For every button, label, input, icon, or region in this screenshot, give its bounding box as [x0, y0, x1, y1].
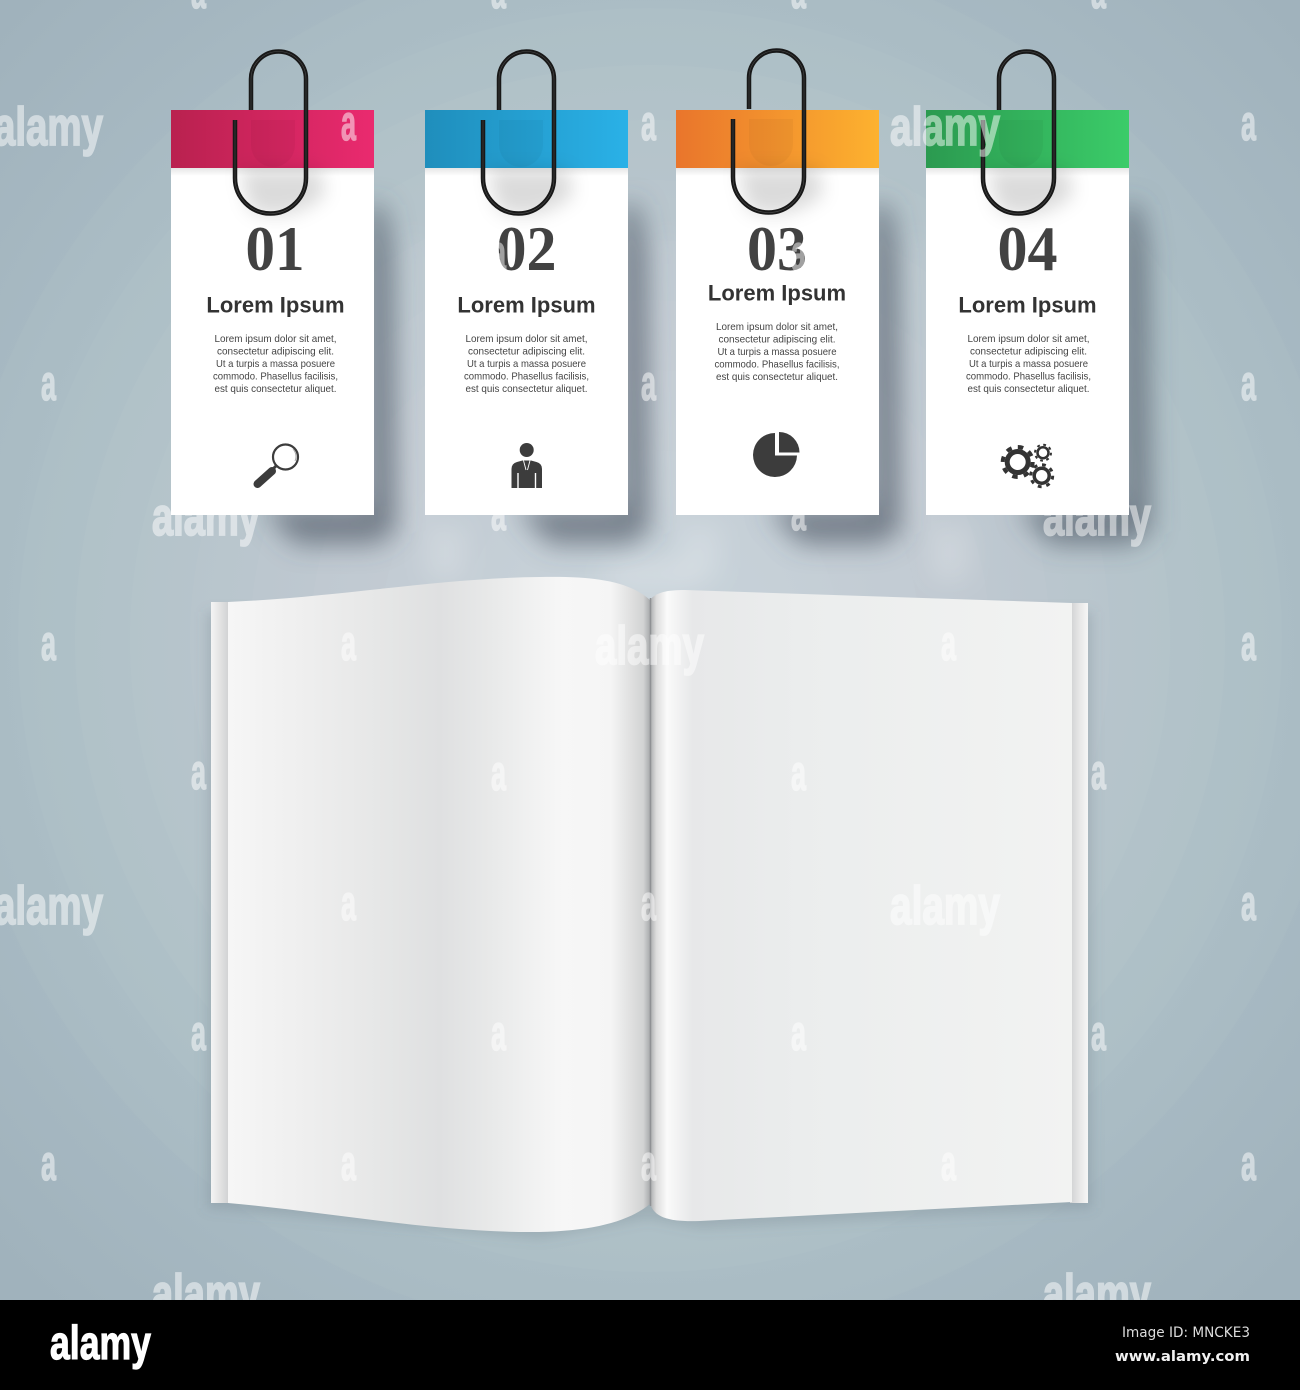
watermarks: alamy [152, 1264, 260, 1324]
book cover left [211, 602, 231, 1203]
panel: card 4 [926, 110, 1129, 515]
watermarks: alamy [1043, 487, 1151, 547]
left page [228, 577, 650, 1232]
icon: gears [1003, 445, 1053, 487]
card 3 body text: est quis consectetur aliquet. [716, 371, 838, 383]
card 2 body text: est quis consectetur aliquet. [466, 383, 588, 395]
website: www.alamy.com [1115, 1349, 1250, 1365]
card 4 body text: est quis consectetur aliquet. [968, 383, 1090, 395]
watermarks: a [1241, 355, 1257, 411]
watermarks: a [1241, 95, 1257, 151]
watermarks: alamy [1043, 1264, 1151, 1324]
card 2 body text: commodo. Phasellus facilisis, [464, 370, 589, 382]
watermarks: a [341, 1135, 357, 1191]
watermarks: a [491, 1005, 507, 1061]
card 3 orange band [676, 110, 879, 168]
card 2 body text: consectetur adipiscing elit. [468, 346, 585, 358]
image id: Image ID: MNCKE3 [1122, 1325, 1250, 1341]
panel: card 1 [171, 110, 374, 515]
watermarks: a [641, 355, 657, 411]
card 2 heading: Lorem Ipsum [457, 292, 596, 318]
card 4 body text: Ut a turpis a massa posuere [969, 358, 1088, 370]
card 4 paper [926, 168, 1129, 515]
watermarks: a [1091, 1005, 1107, 1061]
card 4 body text: consectetur adipiscing elit. [970, 346, 1087, 358]
card 3 paper [676, 168, 879, 515]
watermarks: a [791, 225, 807, 281]
panel: card 3 [676, 110, 879, 515]
card 1 number: 01 [246, 214, 304, 284]
watermarks: a [341, 615, 357, 671]
card 3 body text [714, 321, 840, 383]
footer logo: alamy [50, 1316, 151, 1369]
paperclip 3 [733, 50, 823, 214]
watermarks: a [1241, 615, 1257, 671]
icon: pie chart [753, 432, 800, 477]
card 2 paper [425, 168, 628, 515]
card 1 body text: Lorem ipsum dolor sit amet, [214, 333, 336, 345]
watermarks: a [491, 225, 507, 281]
card 1 pink band [171, 110, 374, 168]
watermarks: a [191, 744, 207, 800]
card 4 body text: Lorem ipsum dolor sit amet, [968, 333, 1090, 345]
card 2 body text: Ut a turpis a massa posuere [467, 358, 586, 370]
watermarks: alamy [890, 876, 1000, 936]
card 3 body text: Ut a turpis a massa posuere [718, 346, 837, 358]
watermarks: alamy [152, 487, 260, 547]
watermarks: a [341, 875, 357, 931]
watermarks: a [641, 875, 657, 931]
card 4 body text [966, 333, 1091, 395]
footer bar [0, 1300, 1300, 1390]
watermarks: a [941, 615, 957, 671]
watermarks: a [791, 485, 807, 541]
watermarks: a [41, 355, 57, 411]
card 3 body text: commodo. Phasellus facilisis, [714, 358, 840, 370]
card 3 body text: Lorem ipsum dolor sit amet, [716, 321, 838, 333]
watermarks: a [1241, 1135, 1257, 1191]
book shadow [207, 612, 1092, 1238]
right page [650, 590, 1072, 1221]
watermarks: a [41, 615, 57, 671]
paperclip 2 [483, 51, 573, 215]
card 2 body text: Lorem ipsum dolor sit amet, [466, 333, 588, 345]
watermarks: a [791, 1005, 807, 1061]
book spine line [650, 598, 652, 1206]
card 1 body text: Ut a turpis a massa posuere [216, 358, 335, 370]
card 1 body text: est quis consectetur aliquet. [214, 383, 336, 395]
icon: business person [512, 443, 542, 488]
card 1 heading: Lorem Ipsum [206, 292, 345, 318]
paperclip 1 [235, 51, 325, 215]
card 2 body text [464, 333, 589, 395]
card 1 body text: consectetur adipiscing elit. [217, 346, 334, 358]
watermarks: alamy [595, 616, 704, 676]
watermarks: a [491, 485, 507, 541]
card 2 blue band [425, 110, 628, 168]
watermarks: a [791, 745, 807, 801]
watermarks: a [191, 1005, 207, 1061]
watermarks: a [941, 1135, 957, 1191]
open book [207, 577, 1092, 1238]
card 3 number: 03 [747, 214, 807, 284]
card shadows [262, 205, 1151, 544]
paperclip 4 [983, 51, 1073, 215]
watermarks: a [641, 95, 657, 151]
watermarks: alamy [890, 97, 1000, 157]
panel: card 2 [425, 110, 628, 515]
card 1 paper [171, 168, 374, 515]
card 4 heading: Lorem Ipsum [958, 292, 1097, 318]
light glow between cards [408, 240, 970, 593]
watermarks: a [41, 1135, 57, 1191]
book cover right [1070, 603, 1088, 1203]
watermarks: a [341, 95, 357, 151]
card 3 heading: Lorem Ipsum [708, 280, 846, 306]
watermarks: a [641, 1135, 657, 1191]
watermarks: a [491, 745, 507, 801]
watermarks: a [1091, 744, 1107, 800]
card 4 number: 04 [998, 214, 1058, 284]
card 1 body text: commodo. Phasellus facilisis, [213, 370, 338, 382]
card 3 body text: consectetur adipiscing elit. [718, 334, 836, 346]
card 1 body text [213, 333, 338, 395]
card 2 number: 02 [496, 214, 556, 284]
card 4 body text: commodo. Phasellus facilisis, [966, 370, 1091, 382]
icon: magnifying glass [258, 444, 298, 484]
card 4 green band [926, 110, 1129, 168]
watermarks: a [1241, 875, 1257, 931]
